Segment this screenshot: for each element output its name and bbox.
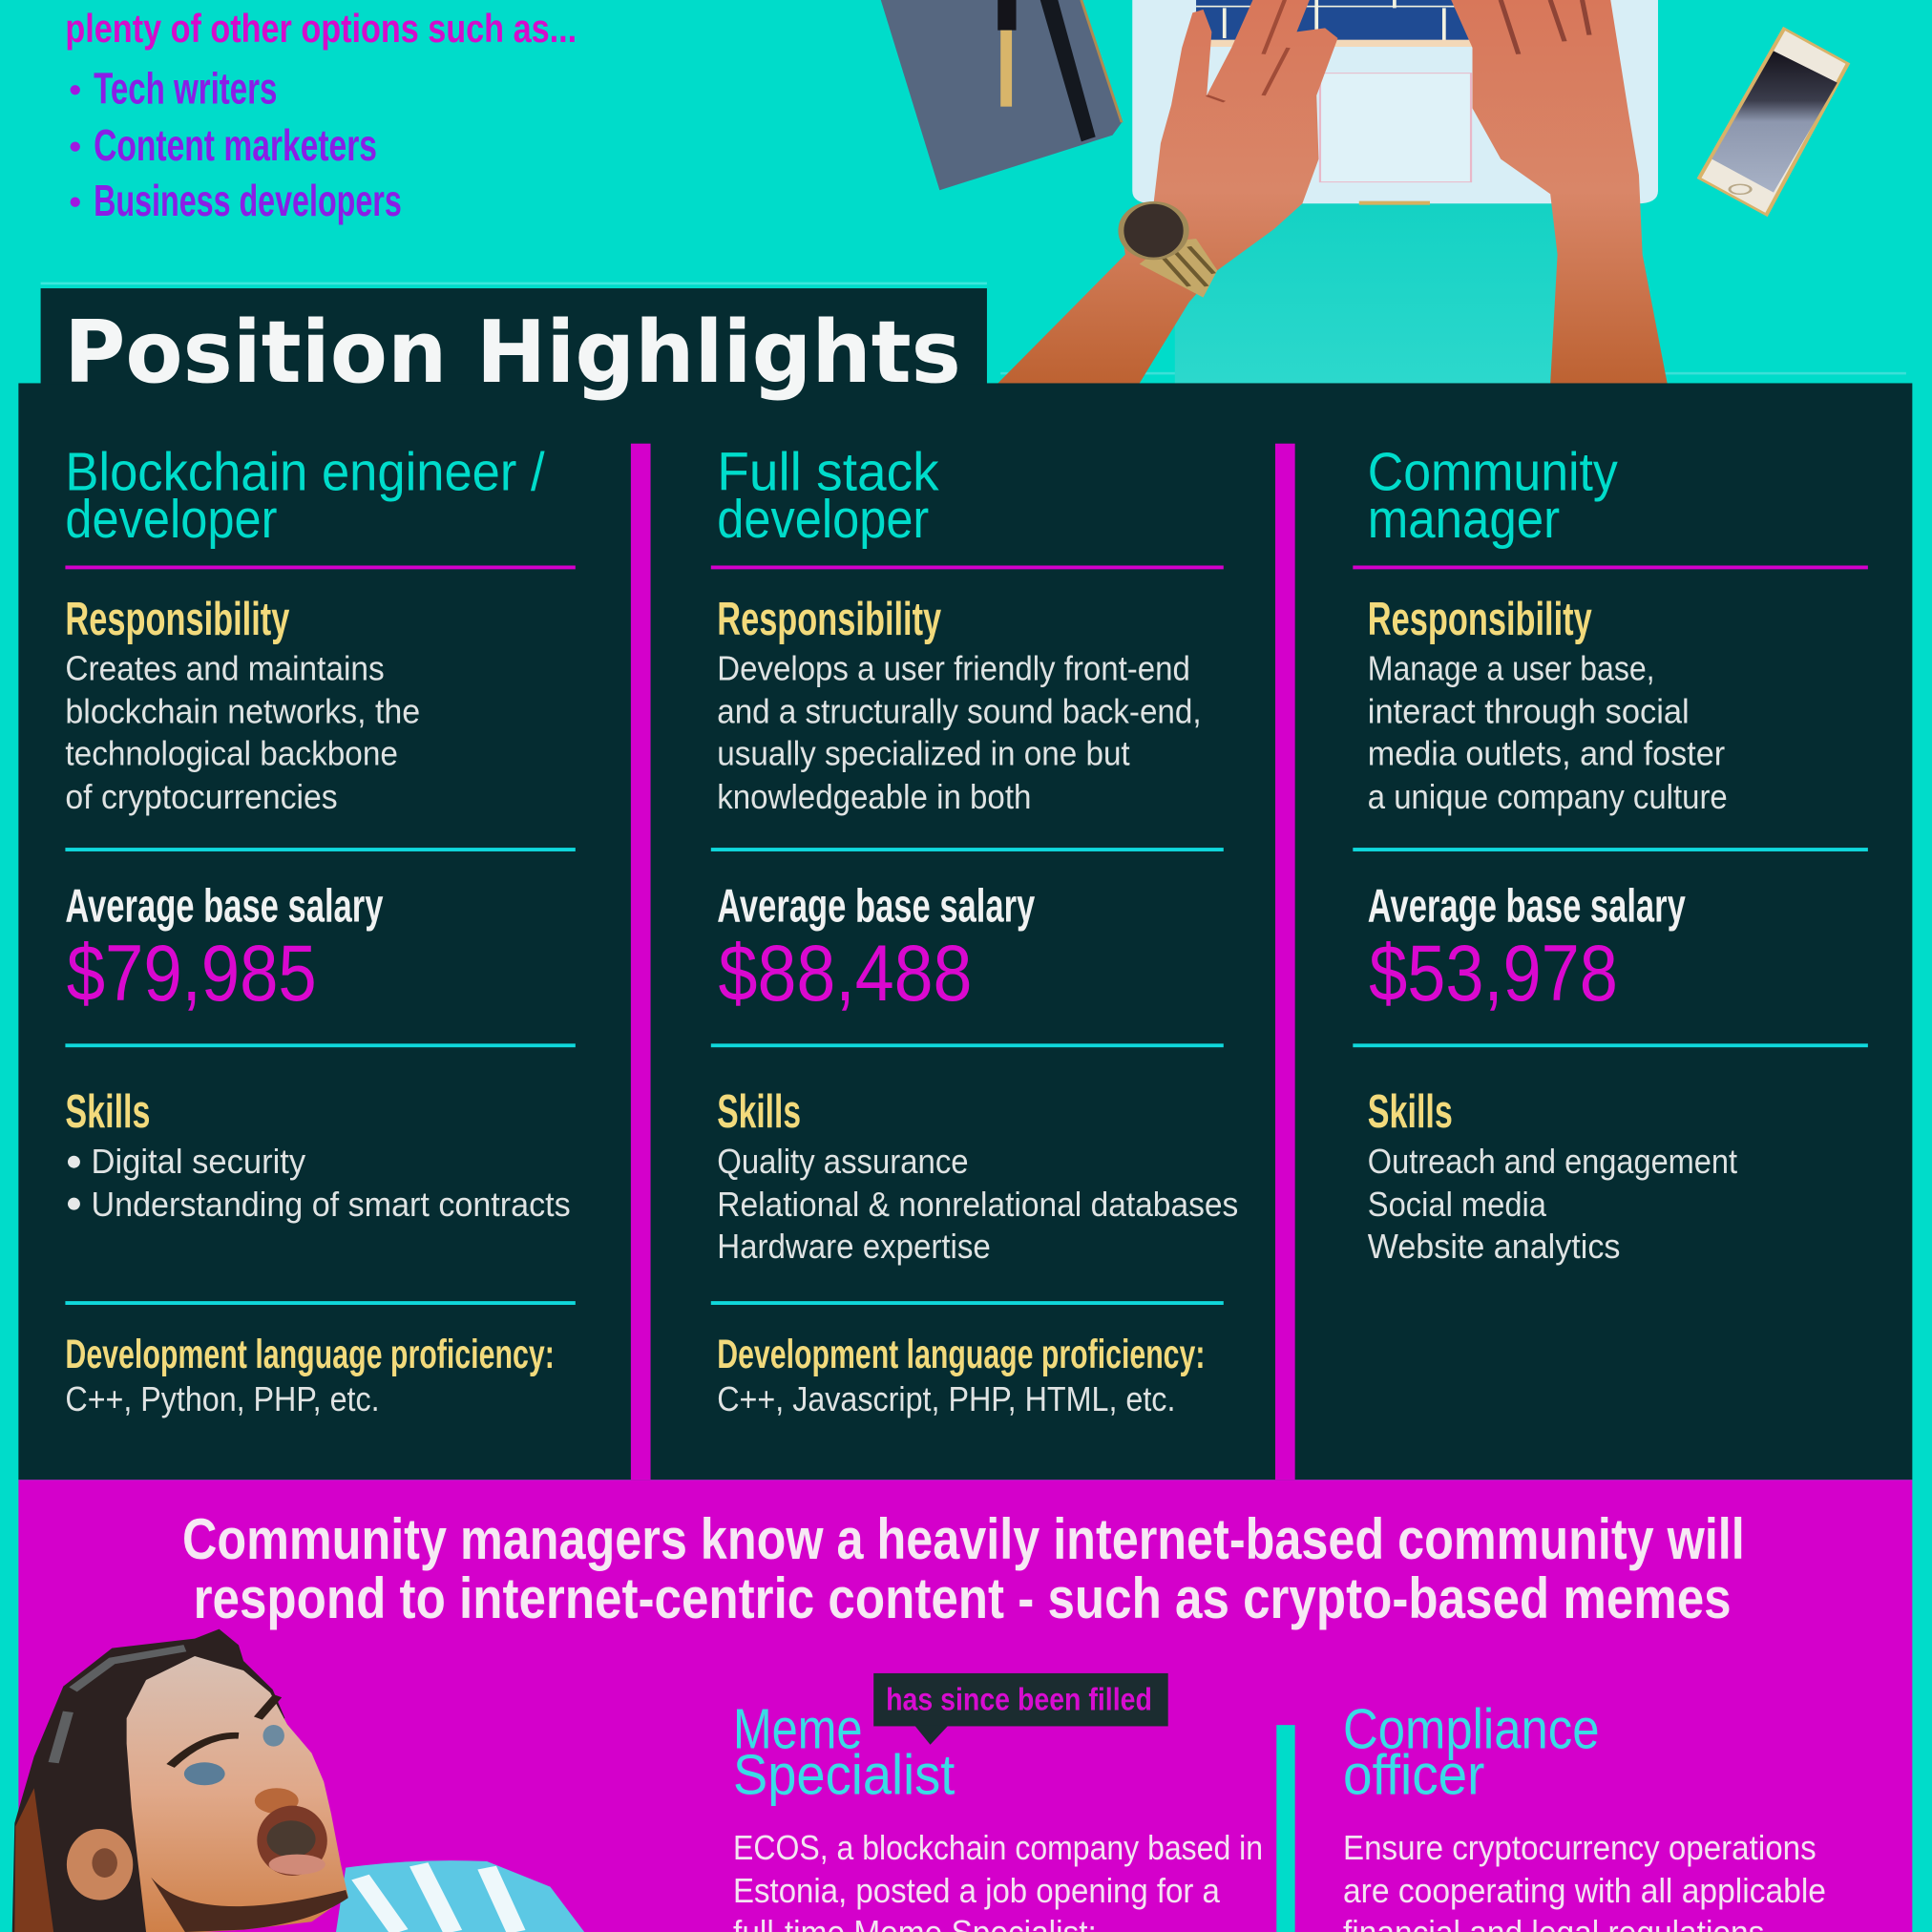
skills: Social media	[1368, 1185, 1547, 1224]
column divider 1	[631, 444, 651, 1480]
skills: Outreach and engagement	[1368, 1142, 1737, 1181]
keyboard	[1196, 0, 1586, 41]
face	[127, 1656, 348, 1932]
list item: tech writers: Tech writers	[94, 63, 277, 113]
responsibility: of cryptocurrencies	[65, 777, 338, 816]
skills: Understanding of smart contracts	[92, 1185, 571, 1224]
job title	[1368, 443, 1618, 550]
list item: business developers: Business developers	[94, 176, 402, 225]
intro text: other options list	[65, 7, 577, 225]
skills: Quality assurance	[717, 1142, 969, 1181]
ear	[67, 1829, 133, 1900]
role title: officer	[1343, 1742, 1484, 1806]
skills: Hardware expertise	[717, 1227, 991, 1266]
mouth	[257, 1806, 327, 1876]
responsibility: Creates and maintains	[65, 649, 385, 688]
description: Estonia, posted a job opening for a	[733, 1871, 1221, 1910]
skills: Relational & nonrelational databases	[717, 1185, 1238, 1224]
photo: man making a face	[12, 1629, 584, 1932]
soft surface below laptop	[1175, 203, 1558, 384]
responsibility	[1368, 594, 1728, 816]
responsibility	[65, 594, 420, 816]
tooltip: has since been filled	[873, 1673, 1168, 1745]
responsibility: usually specialized in one but	[717, 734, 1130, 773]
job title: Full stack	[717, 443, 939, 503]
list item: business developers	[71, 176, 402, 225]
job title: manager	[1368, 490, 1560, 550]
skills: Skills	[717, 1086, 801, 1138]
description	[733, 1828, 1263, 1932]
phone	[1699, 29, 1848, 215]
tooltip: has since been filled: has since been filled	[886, 1683, 1152, 1718]
skills: Website analytics	[1368, 1227, 1620, 1266]
salary: $53,978	[1369, 928, 1618, 1018]
column divider 2	[1275, 444, 1295, 1480]
nose	[255, 1788, 299, 1814]
description: Ensure cryptocurrency operations	[1343, 1828, 1816, 1867]
responsibility: Responsibility	[717, 594, 942, 645]
meme specialist block	[733, 1697, 1263, 1932]
compliance officer block	[1343, 1697, 1826, 1932]
role title: Compliance	[1343, 1697, 1599, 1761]
skills: Skills	[1368, 1086, 1453, 1138]
job title	[65, 443, 545, 550]
language proficiency: C++, Javascript, PHP, HTML, etc.	[717, 1379, 1175, 1418]
role title	[1343, 1697, 1599, 1806]
responsibility: knowledgeable in both	[717, 777, 1031, 816]
language proficiency: C++, Python, PHP, etc.	[65, 1379, 380, 1418]
salary: $79,985	[67, 928, 317, 1018]
salary	[1368, 881, 1686, 1018]
column: blockchain engineer	[65, 443, 576, 1418]
list item: content marketers: Content marketers	[94, 120, 377, 170]
photo: hands typing on laptop with notebook and phone	[881, 0, 1848, 384]
salary	[65, 881, 384, 1018]
skills	[65, 1086, 571, 1224]
role title: Specialist	[733, 1742, 956, 1806]
responsibility: Manage a user base,	[1368, 649, 1655, 688]
responsibility: and a structurally sound back-end,	[717, 692, 1202, 731]
responsibility: interact through social	[1368, 692, 1690, 731]
salary: Average base salary	[65, 881, 384, 933]
skills: Digital security	[92, 1142, 305, 1181]
language proficiency	[717, 1332, 1205, 1418]
responsibility: technological backbone	[65, 734, 398, 773]
responsibility: blockchain networks, the	[65, 692, 420, 731]
watch	[1121, 202, 1217, 298]
skills	[1368, 1086, 1737, 1266]
intro line: plenty of other options such as...	[65, 7, 577, 51]
job title: Community	[1368, 443, 1618, 503]
panel: position highlights	[18, 288, 1912, 1480]
responsibility: media outlets, and foster	[1368, 734, 1725, 773]
column: community manager	[1353, 443, 1868, 1266]
beard	[151, 1878, 348, 1932]
divider	[1276, 1725, 1295, 1932]
role title	[733, 1697, 956, 1806]
salary	[717, 881, 1036, 1018]
salary: $88,488	[719, 928, 972, 1018]
trackpad	[1320, 74, 1471, 182]
language proficiency: Development language proficiency:	[717, 1332, 1205, 1377]
language proficiency: Development language proficiency:	[65, 1332, 555, 1377]
role title: Meme	[733, 1697, 863, 1761]
left hand and arm	[998, 0, 1338, 384]
skills: Skills	[65, 1086, 150, 1138]
notebook	[881, 0, 1122, 190]
banner heading	[182, 1506, 1745, 1630]
job title: developer	[717, 490, 929, 550]
right hand and arm	[1451, 0, 1668, 384]
job title: Blockchain engineer /	[65, 443, 545, 503]
salary: Average base salary	[717, 881, 1036, 933]
description: ECOS, a blockchain company based in	[733, 1828, 1263, 1867]
responsibility: Responsibility	[1368, 594, 1592, 645]
job title	[717, 443, 939, 550]
description: are cooperating with all applicable	[1343, 1871, 1826, 1910]
responsibility: Develops a user friendly front-end	[717, 649, 1190, 688]
job title: developer	[65, 490, 277, 550]
shirt	[336, 1860, 584, 1932]
list item: content marketers	[71, 120, 377, 170]
panel: community managers and memes	[12, 1480, 1912, 1932]
title: Position Highlights	[64, 303, 961, 403]
description	[1343, 1828, 1826, 1932]
title tab	[41, 288, 987, 403]
responsibility	[717, 594, 1202, 816]
laptop	[1132, 0, 1658, 205]
responsibility: Responsibility	[65, 594, 290, 645]
language proficiency	[65, 1332, 555, 1418]
list item: tech writers	[71, 63, 277, 113]
salary: Average base salary	[1368, 881, 1686, 933]
responsibility: a unique company culture	[1368, 777, 1728, 816]
hair	[12, 1629, 284, 1932]
skills	[717, 1086, 1238, 1266]
eyes and brows	[171, 1696, 278, 1766]
column: full stack developer	[711, 443, 1238, 1418]
